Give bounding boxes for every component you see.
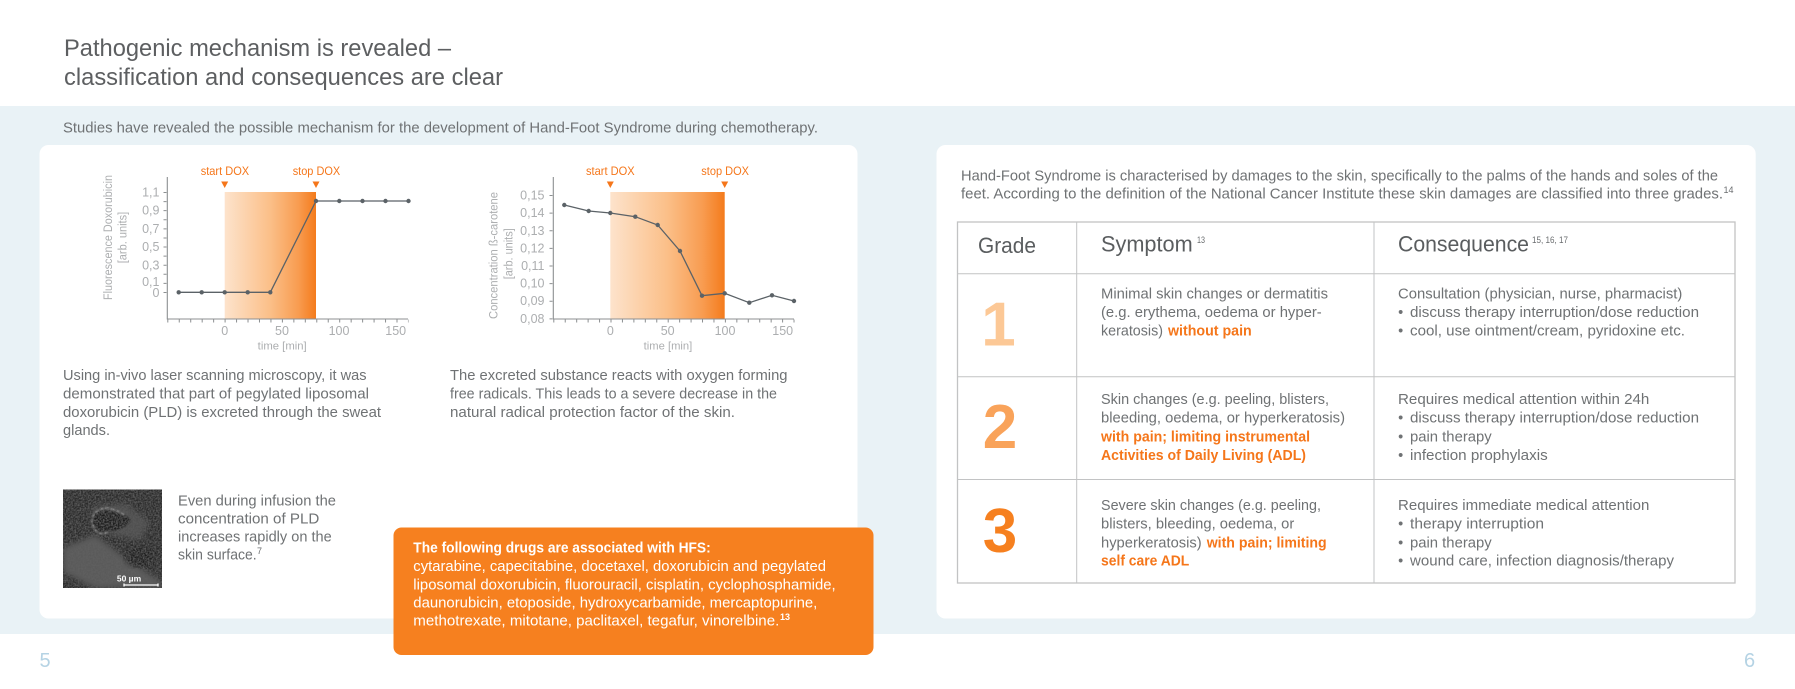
row: grade 3: • [1398, 517, 1403, 533]
row: grade 1: discuss therapy interruption/dose reduction [1410, 305, 1699, 321]
chart: fluorescence doxorubicin: 50 [275, 324, 289, 338]
row: grade 3: hyperkeratosis) [1101, 535, 1202, 551]
row: grade 2: 2 [983, 393, 1017, 462]
chart: fluorescence doxorubicin: Fluorescence Doxorubicin [103, 175, 115, 300]
row: grade 3: Requires immediate medical attention [1398, 498, 1649, 514]
subtitle: Studies have revealed the possible mechanism for the development of Hand-Foot Syndrome during chemotherapy. [63, 120, 818, 136]
row: grade 2: • [1398, 429, 1403, 445]
row: grade 2: discuss therapy interruption/dose reduction [1410, 411, 1699, 427]
row: grade 1: 1 [981, 291, 1016, 360]
row: grade 3: 3 [983, 497, 1017, 566]
row: grade 3: blisters, bleeding, oedema, or [1101, 517, 1294, 533]
text block: infusion: Even during infusion the [178, 494, 336, 510]
chart: fluorescence doxorubicin: 0,3 [142, 258, 160, 272]
callout: drugs associated with HFS: cytarabine, capecitabine, docetaxel, doxorubicin and pegylated [413, 559, 826, 575]
chart: concentration beta-carotene: 0,14 [520, 206, 545, 220]
row: grade 3: with pain; limiting [1206, 535, 1327, 551]
chart: fluorescence doxorubicin: 0,1 [142, 275, 160, 289]
chart: concentration beta-carotene: 0,13 [520, 224, 545, 238]
text block: laser scanning microscopy: Using in-vivo laser scanning microscopy, it was [63, 368, 366, 384]
text block: free radicals [450, 368, 788, 421]
text block: infusion: skin surface. [178, 548, 257, 564]
chart: fluorescence doxorubicin: 0,7 [142, 222, 160, 236]
table header: 15, 16, 17 [1532, 235, 1568, 245]
text block: laser scanning microscopy: doxorubicin (PLD) is excreted through the sweat [63, 405, 381, 421]
chart: concentration beta-carotene: [arb. units] [504, 228, 516, 279]
chart: concentration beta-carotene: 0 [607, 324, 614, 338]
chart: concentration beta-carotene: 0,08 [520, 312, 545, 326]
chart: concentration beta-carotene: stop DOX [701, 164, 749, 178]
chart: fluorescence doxorubicin: 0,5 [142, 240, 160, 254]
chart: concentration beta-carotene: time [min] [644, 340, 692, 352]
image: skin micrograph [63, 490, 162, 588]
chart: fluorescence doxorubicin: 100 [329, 324, 349, 338]
row: grade 2: Skin changes (e.g. peeling, blisters, [1101, 392, 1329, 408]
chart: concentration beta-carotene: 0,12 [520, 242, 545, 256]
chart: fluorescence doxorubicin [103, 164, 411, 352]
row: grade 3 [983, 497, 1675, 570]
row: grade 3: pain therapy [1410, 535, 1492, 551]
chart: concentration beta-carotene: 100 [715, 324, 735, 338]
text block: infusion: 7 [257, 546, 262, 556]
table header: Grade [978, 233, 1036, 258]
panel: left card [40, 145, 858, 618]
chart: fluorescence doxorubicin: [arb. units] [118, 212, 130, 263]
row: grade 2 [983, 392, 1699, 464]
panel: right card [936, 145, 1756, 618]
row: grade 3: Severe skin changes (e.g. peeling, [1101, 498, 1321, 514]
row: grade 1: Minimal skin changes or dermatitis [1101, 286, 1328, 302]
chart: concentration beta-carotene: 0,11 [521, 259, 545, 273]
row: grade 2: • [1398, 448, 1403, 464]
text block: infusion: increases rapidly on the [178, 530, 332, 546]
text block: laser scanning microscopy [63, 368, 381, 439]
callout: drugs associated with HFS: daunorubicin, etoposide, hydroxycarbamide, mercaptopurine, [413, 596, 817, 612]
image: skin micrograph: 50 µm [117, 574, 142, 584]
row: grade 1: Consultation (physician, nurse, pharmacist) [1398, 286, 1682, 302]
row: grade 1: keratosis) [1101, 324, 1163, 340]
table header [978, 232, 1568, 258]
text block: laser scanning microscopy: glands. [63, 423, 110, 439]
row: grade 1: • [1398, 324, 1403, 340]
chart: fluorescence doxorubicin: start DOX [201, 164, 249, 178]
row: grade 1 [981, 286, 1699, 360]
row: grade 2: infection prophylaxis [1410, 448, 1548, 464]
row: grade 3: • [1398, 535, 1403, 551]
chart: concentration beta-carotene: 0,09 [520, 294, 545, 308]
chart: concentration beta-carotene: 0,15 [520, 188, 545, 202]
chart: fluorescence doxorubicin: stop DOX [293, 164, 340, 178]
text block: free radicals: The excreted substance reacts with oxygen forming [450, 368, 788, 384]
table header: 13 [1197, 235, 1205, 245]
callout: drugs associated with HFS: 13 [780, 612, 790, 622]
row: grade 3: therapy interruption [1410, 517, 1544, 533]
text block: laser scanning microscopy: demonstrated that part of pegylated liposomal [63, 386, 369, 402]
page number 5: 5 [40, 650, 51, 672]
row: grade 2: with pain; limiting instrumental [1100, 429, 1310, 445]
row: grade 1: without pain [1167, 324, 1252, 340]
chart: fluorescence doxorubicin: 0,9 [142, 204, 160, 218]
chart: concentration beta-carotene: Concentration ß-carotene [488, 192, 500, 319]
chart: fluorescence doxorubicin: 1,1 [142, 186, 160, 200]
chart: concentration beta-carotene [488, 164, 796, 352]
chart: fluorescence doxorubicin: 0 [221, 324, 228, 338]
text block: free radicals: natural radical protection factor of the skin. [450, 405, 735, 421]
row: grade 2: • [1398, 411, 1403, 427]
text block: intro: Hand-Foot Syndrome is characterised by damages to the skin, specifically to the palms of the hands and soles of the [961, 169, 1718, 185]
row: grade 3: self care ADL [1101, 554, 1189, 570]
title: classification and consequences are clear [64, 64, 503, 91]
callout: drugs associated with HFS: liposomal doxorubicin, fluorouracil, cisplatin, cyclophosphamide, [413, 577, 836, 593]
text block: infusion: concentration of PLD [178, 512, 319, 528]
table: grades [958, 222, 1735, 583]
text block: intro: 14 [1724, 185, 1734, 195]
background band [0, 106, 1795, 634]
row: grade 2: Activities of Daily Living (ADL) [1101, 448, 1306, 464]
row: grade 3: wound care, infection diagnosis/therapy [1409, 554, 1675, 570]
chart: concentration beta-carotene: 150 [772, 324, 793, 338]
table header: Consequence [1398, 232, 1529, 257]
chart: fluorescence doxorubicin: 0 [153, 286, 160, 300]
callout: drugs associated with HFS [394, 528, 874, 655]
chart: concentration beta-carotene: 50 [661, 324, 675, 338]
callout: drugs associated with HFS: The following drugs are associated with HFS: [413, 541, 711, 557]
row: grade 1: (e.g. erythema, oedema or hyper- [1101, 305, 1322, 321]
text block: free radicals: free radicals. This leads to a severe decrease in the [450, 386, 777, 402]
chart: concentration beta-carotene: 0,10 [520, 276, 545, 290]
chart: fluorescence doxorubicin: 150 [385, 324, 406, 338]
table header: Symptom [1101, 232, 1193, 257]
row: grade 1: • [1398, 305, 1403, 321]
row: grade 3: • [1398, 554, 1403, 570]
row: grade 2: pain therapy [1410, 429, 1492, 445]
text block: infusion [178, 494, 336, 564]
text block: intro: feet. According to the definition of the National Cancer Institute these skin damages are classified into three grades. [961, 187, 1723, 203]
chart: concentration beta-carotene: start DOX [586, 164, 635, 178]
chart: fluorescence doxorubicin: time [min] [258, 340, 307, 352]
row: grade 2: Requires medical attention within 24h [1398, 392, 1649, 408]
row: grade 2: bleeding, oedema, or hyperkeratosis) [1101, 411, 1345, 427]
title: Pathogenic mechanism is revealed – [64, 35, 452, 62]
callout: drugs associated with HFS: methotrexate, mitotane, paclitaxel, tegafur, vinorelbine. [413, 614, 779, 630]
text block: intro [961, 169, 1734, 203]
row: grade 1: cool, use ointment/cream, pyridoxine etc. [1410, 324, 1685, 340]
title [64, 35, 503, 91]
page number 6: 6 [1744, 650, 1755, 672]
